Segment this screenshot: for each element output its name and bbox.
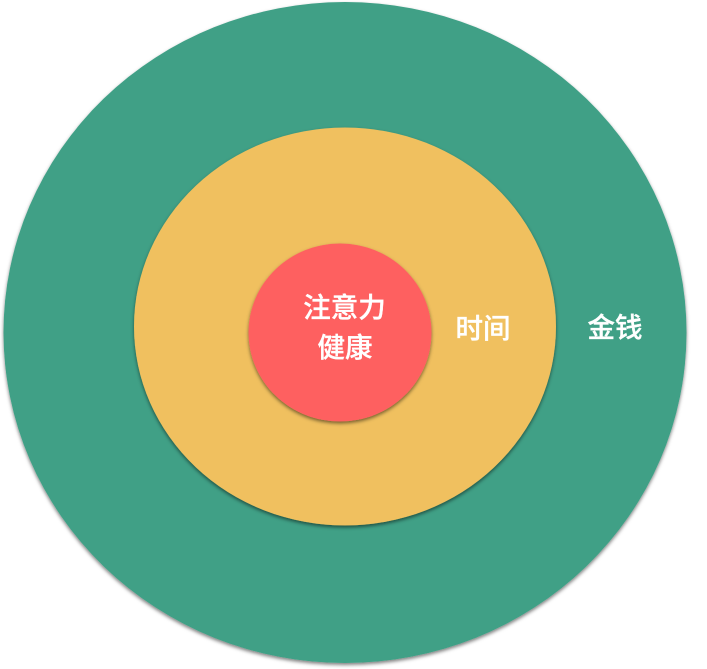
- inner circle: attention and health: [248, 244, 432, 422]
- label: attention: 注意力: [303, 292, 386, 323]
- label: money: 金钱: [588, 312, 642, 343]
- label: time: 时间: [456, 313, 510, 344]
- label: health: 健康: [318, 332, 372, 363]
